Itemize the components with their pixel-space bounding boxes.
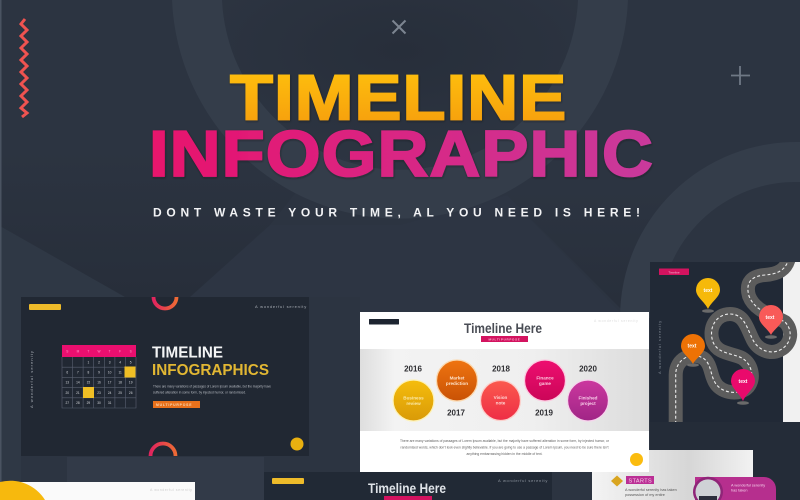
pin: orange: text — [688, 344, 697, 350]
vertical caption: A wonderful serenity — [29, 350, 34, 408]
title — [149, 62, 654, 190]
slide heading — [152, 344, 269, 379]
calendar: 18 — [118, 381, 122, 385]
slide description: There are many variations of passages of Lorem Ipsum available, but the majority have — [153, 384, 271, 388]
panel: bottom left white slide — [0, 481, 195, 500]
orange tag: MULTIPURPOSE — [156, 403, 192, 407]
node: market prediction: prediction — [446, 381, 468, 386]
starts tag: STARTS — [628, 478, 652, 484]
year labels: 2019 — [535, 408, 553, 418]
node: vision note: Vision — [494, 395, 508, 400]
pin: pink — [731, 369, 755, 405]
calendar: W — [97, 350, 101, 354]
pin: yellow: text — [704, 288, 713, 294]
slide description: suffered alteration in some form, by injected humor, or randomised. — [153, 390, 246, 394]
black tag — [369, 319, 399, 324]
node: finished project: project — [580, 401, 596, 406]
body text: There are many variations of passages of Lorem Ipsum available, but the majority have suffered alteration in some form, by injected humor, or — [400, 439, 610, 443]
year labels: 2016 — [404, 364, 422, 374]
calendar: 6 — [66, 370, 68, 374]
slide heading: Timeline Here — [368, 481, 446, 496]
calendar: 10 — [108, 370, 112, 374]
calendar: 3 — [109, 360, 111, 364]
pink tag — [481, 336, 528, 342]
pink tag: MULTIPURPOSE — [488, 338, 521, 342]
calendar: 5 — [130, 360, 132, 364]
slide description — [153, 384, 271, 394]
node: market prediction: Market — [450, 376, 465, 380]
subtitle: DONT WASTE YOUR TIME, AL YOU NEED IS HERE! — [153, 206, 640, 220]
calendar: 31 — [108, 401, 112, 405]
tag — [29, 304, 61, 310]
calendar: F — [119, 350, 121, 354]
node: finance game: game — [539, 381, 551, 386]
slide caption: A wonderful serenity — [498, 478, 548, 483]
pin: pink: text — [739, 379, 748, 385]
panel: lower right dark band — [650, 422, 800, 500]
node: finance game: Finance — [536, 376, 554, 380]
pin: yellow — [696, 278, 720, 313]
calendar: 16 — [97, 381, 101, 385]
tag — [272, 478, 304, 484]
calendar: 8 — [88, 370, 90, 374]
panel: timeline slide — [360, 312, 649, 472]
panel: white strip right of road slide — [783, 262, 800, 422]
calendar: S — [130, 350, 132, 354]
text: possession of my entire — [625, 493, 665, 497]
panel: road slide — [650, 258, 790, 424]
pin: red: text — [766, 315, 775, 321]
node: vision note: note — [496, 400, 506, 406]
calendar: 25 — [118, 391, 122, 395]
slide caption: A wonderful serenity — [150, 488, 192, 492]
text: A wonderful serenity has taken — [625, 488, 677, 492]
calendar: 26 — [129, 391, 133, 395]
image band — [360, 349, 649, 431]
calendar: 24 — [108, 391, 112, 395]
calendar: 20 — [66, 391, 69, 395]
purple pill: has taken — [731, 488, 747, 492]
calendar: 11 — [118, 370, 122, 374]
calendar: 13 — [66, 381, 69, 385]
yellow dot — [290, 438, 304, 450]
calendar: 19 — [129, 381, 133, 385]
node: business review — [393, 380, 434, 421]
calendar: 28 — [76, 401, 80, 405]
slide heading: Timeline Here — [464, 321, 542, 336]
node: business review: review — [406, 401, 421, 406]
pin: red — [759, 305, 783, 339]
slide heading: TIMELINE — [152, 344, 223, 362]
pink tag — [384, 496, 432, 500]
year labels: 2017 — [447, 408, 465, 418]
body text: anything embarrassing hidden in the middle of text. — [466, 452, 543, 456]
node: finance game — [524, 360, 566, 401]
text — [625, 488, 677, 497]
node: finished project — [568, 380, 608, 421]
starts tag — [626, 476, 654, 484]
year labels: 2020 — [579, 364, 597, 374]
panel: bottom right slide — [592, 450, 776, 500]
icon: cross — [392, 20, 406, 34]
orange tag — [153, 401, 200, 408]
purple pill: A wonderful serenity — [731, 484, 765, 488]
calendar: 7 — [77, 370, 79, 374]
calendar: 30 — [97, 401, 101, 405]
node: finished project: Finished — [579, 396, 598, 400]
calendar: 4 — [119, 360, 121, 364]
node: business review: Business — [403, 396, 424, 400]
year labels: 2018 — [492, 364, 510, 374]
tag — [659, 268, 689, 275]
calendar: 29 — [87, 401, 90, 405]
icon: zigzag — [21, 19, 27, 117]
calendar: 17 — [108, 381, 112, 385]
pin: orange — [681, 334, 705, 367]
purple pill — [693, 477, 776, 500]
calendar: 27 — [66, 401, 69, 405]
slide heading: INFOGRAPHICS — [152, 362, 269, 379]
calendar: T — [87, 350, 89, 354]
road — [676, 258, 790, 424]
panel: bottom dark slide — [264, 472, 552, 500]
calendar: 1 — [88, 360, 90, 364]
calendar: 14 — [76, 381, 80, 385]
year labels — [404, 364, 597, 418]
icon: plus — [731, 66, 750, 85]
decorative arcs — [150, 286, 176, 468]
panel: calendar slide — [21, 297, 309, 456]
calendar: S — [66, 350, 68, 354]
calendar: 2 — [98, 360, 100, 364]
body text: randomised words, which don't look even slightly believable. If you are going to use a passage of Lorem Ipsum, you need to be sure there isn't — [400, 446, 609, 450]
yellow dot — [630, 453, 643, 466]
calendar: M — [77, 350, 80, 354]
slide caption: A wonderful serenity — [594, 319, 639, 323]
body text — [400, 439, 610, 456]
node: vision note — [480, 380, 520, 420]
title: INFOGRAPHIC — [149, 118, 654, 190]
calendar: 23 — [97, 391, 101, 395]
calendar: T — [109, 350, 111, 354]
title: TIMELINE — [230, 62, 567, 134]
calendar — [62, 345, 136, 408]
calendar: 15 — [87, 381, 90, 385]
slide caption: A wonderful serenity — [255, 304, 307, 309]
diamond icon — [611, 476, 623, 486]
tag: Timeline — [668, 270, 680, 274]
calendar: 21 — [76, 391, 80, 395]
yellow quarter circle — [0, 481, 45, 500]
node: market prediction — [436, 360, 478, 401]
vertical caption: A wonderful serenity — [658, 320, 662, 374]
calendar: 9 — [98, 370, 100, 374]
